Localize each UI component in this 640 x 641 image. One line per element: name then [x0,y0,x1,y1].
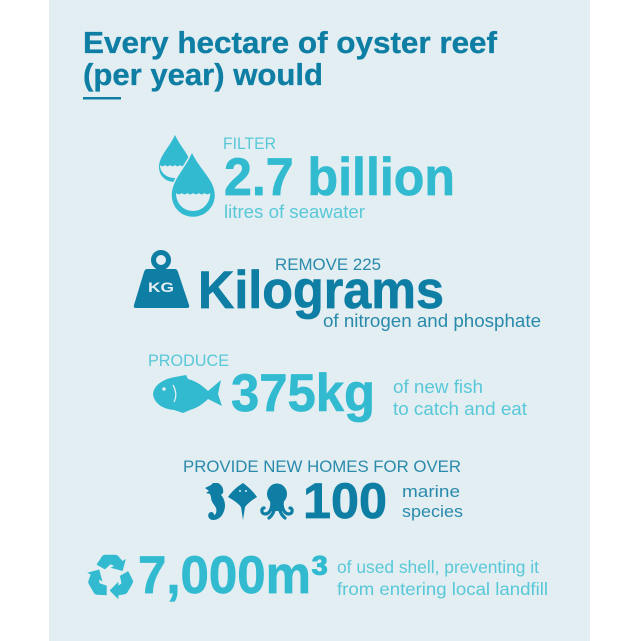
icon: recycle arrows [84,555,137,601]
caption: marine species: marine [402,482,460,501]
caption: used shell: of used shell, preventing it [337,557,539,577]
caption: marine species: species [402,502,463,521]
stat: marine species [183,457,463,529]
caption: new fish [393,377,527,419]
caption: marine species [402,482,463,521]
figure: 2.7 billion: 2.7 billion [224,148,455,207]
title: (per year) would [83,57,323,92]
figure: kilograms: Kilograms [198,261,444,320]
figure: 100: 100 [303,473,387,529]
icon: seahorse [205,483,225,520]
caption: new fish: to catch and eat [393,399,527,419]
title: Every hectare of oyster reef [83,25,498,60]
label: provide new homes: PROVIDE NEW HOMES FOR OVER [183,457,461,476]
icon: kg weight [134,252,189,308]
stat: remove nutrients [134,252,541,331]
stat: used shell [84,546,548,605]
label: produce: PRODUCE [148,351,229,370]
caption: used shell: from entering local landfill [337,579,548,599]
caption: litres of seawater: litres of seawater [224,202,365,222]
title [83,25,498,100]
figure: 375kg: 375kg [231,364,375,423]
stat: produce fish [148,351,527,423]
stat: filter seawater [159,134,455,222]
figure: 7,000 cubic metres: 7,000m³ [138,546,328,605]
icon: octopus [262,484,292,518]
caption: new fish: of new fish [393,377,483,397]
label: filter: FILTER [223,134,276,153]
icon: water drops [159,135,216,218]
icon: fish [153,375,222,413]
caption: used shell [337,557,548,599]
icon: kg weight: KG [148,280,174,295]
icon: stingray [228,483,257,520]
caption: nitrogen and phosphate: of nitrogen and phosphate [323,311,541,331]
label: remove 225: REMOVE 225 [275,255,381,274]
